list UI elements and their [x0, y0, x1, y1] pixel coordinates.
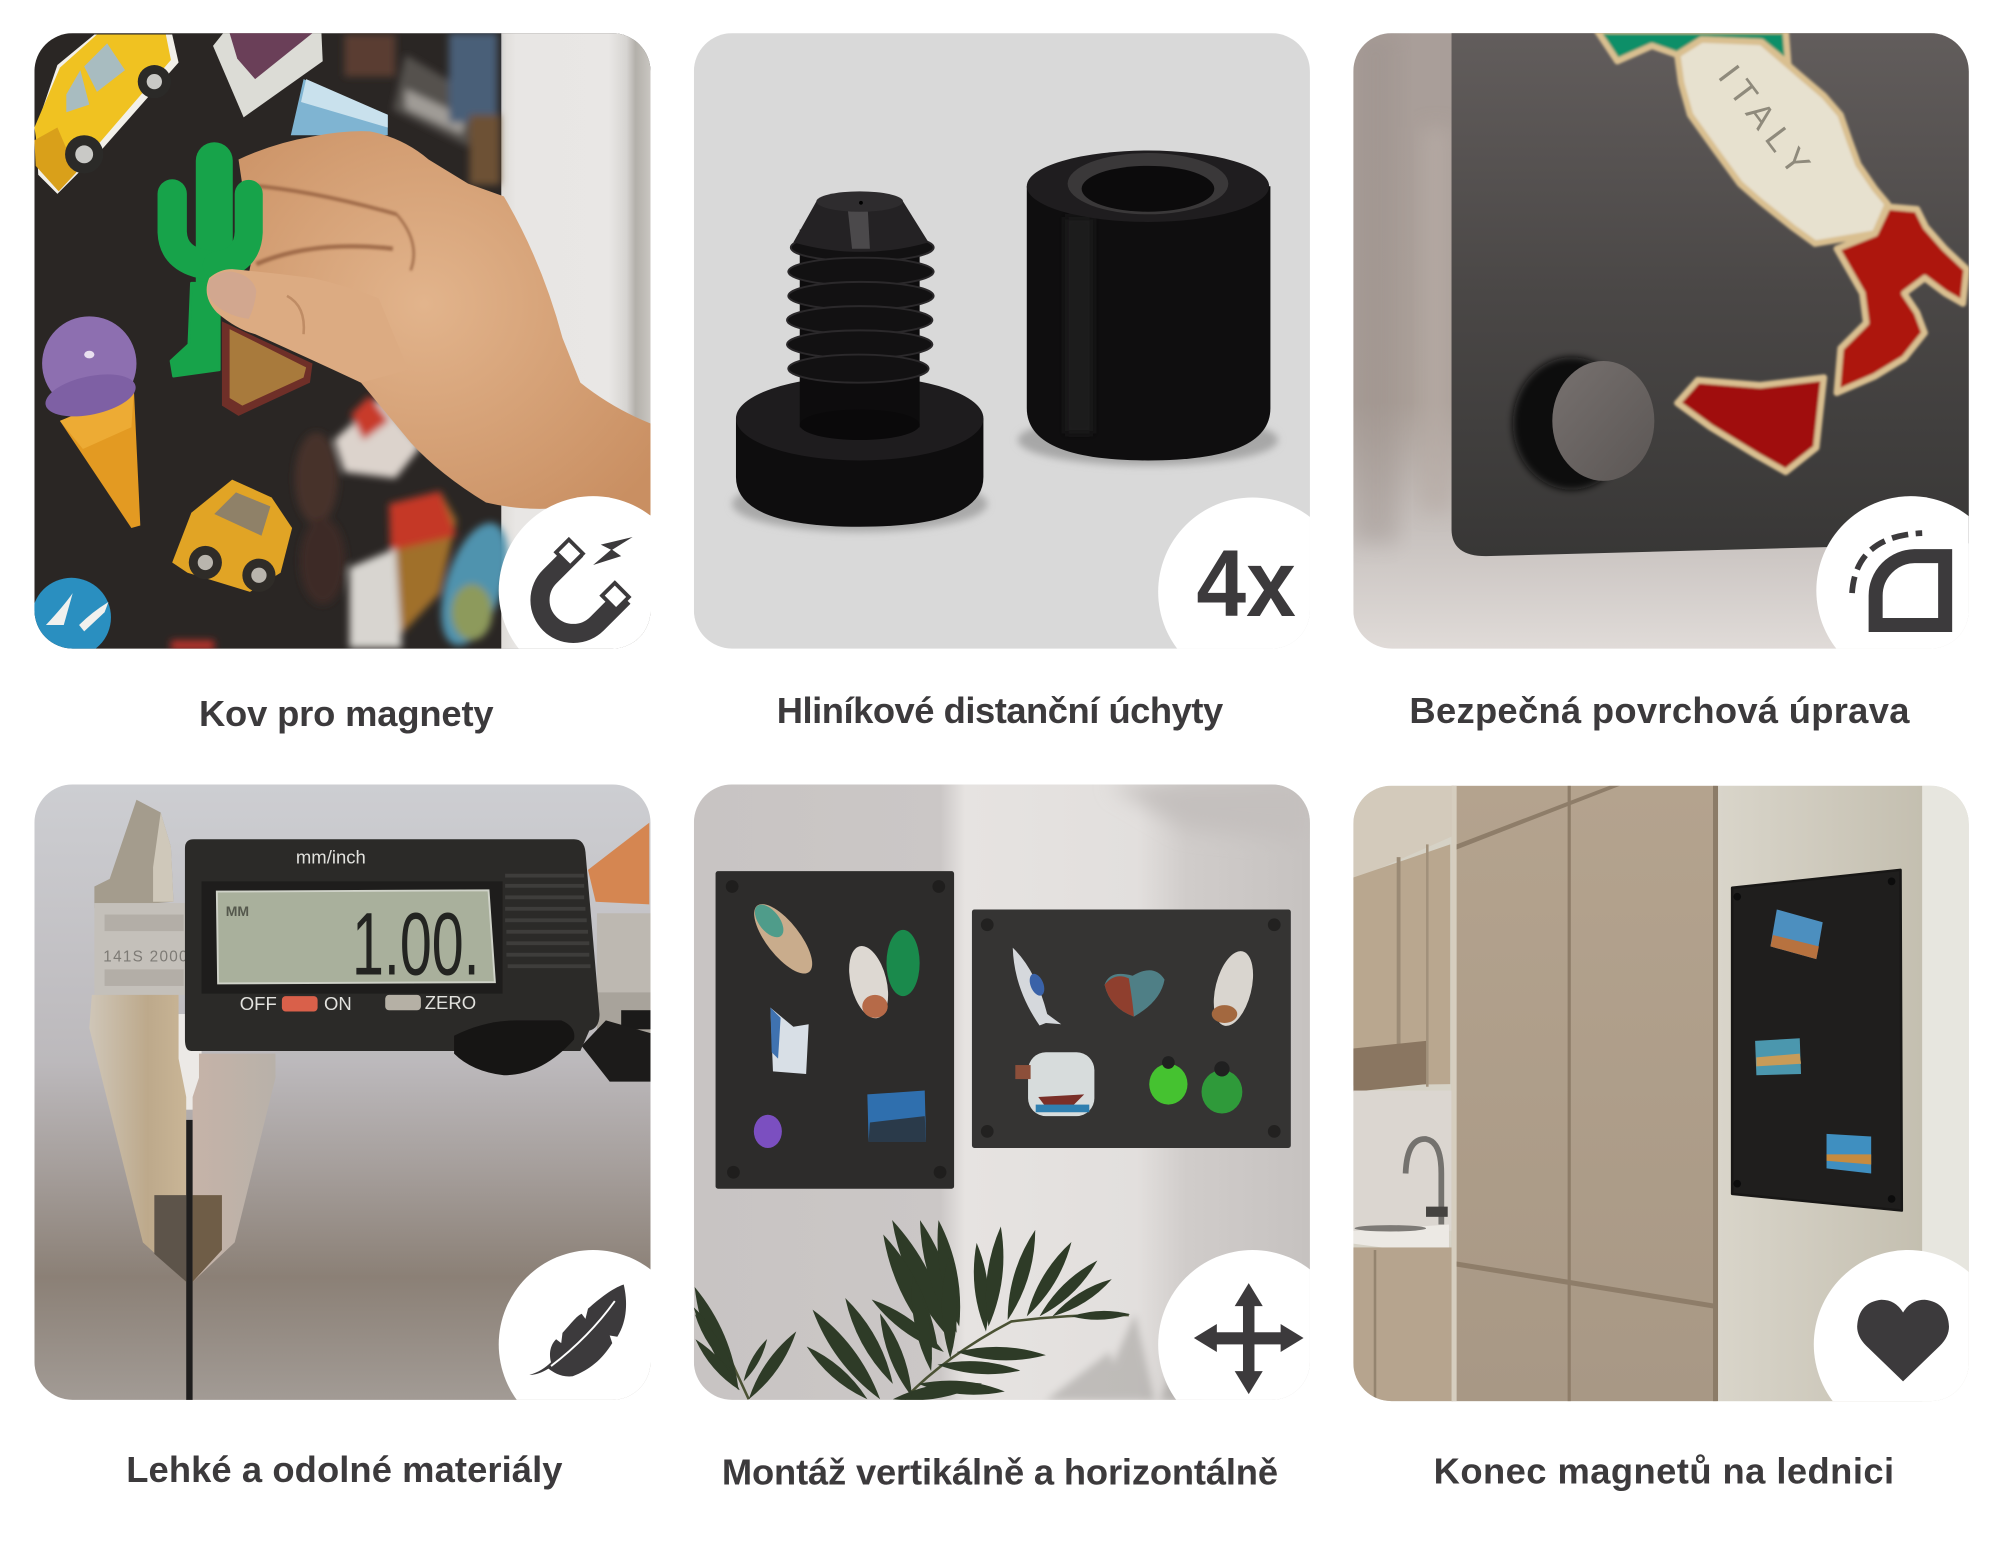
caption: Hliníkové distanční úchyty	[777, 690, 1224, 731]
panel: safe surface finish	[1353, 31, 2000, 731]
labels and buttons: ZERO	[425, 992, 476, 1013]
LCD display: 1.00.	[352, 893, 480, 993]
photo: dark board with magnets	[32, 33, 651, 657]
icon: rounded corner	[1852, 533, 1945, 625]
caption: Lehké a odolné materiály	[126, 1449, 563, 1490]
magnet: green cactus	[171, 161, 249, 376]
magnet: yellow car	[34, 34, 179, 194]
badge circle	[1814, 1250, 2000, 1439]
caption: Montáž vertikálně a horizontálně	[722, 1452, 1278, 1493]
icon: magnet	[540, 537, 633, 633]
magnet: misc behind cactus	[222, 321, 312, 416]
photo: cylinder spacer	[1018, 151, 1278, 466]
labels and buttons: mm/inch	[296, 847, 366, 868]
plant	[694, 1220, 1176, 1400]
icon: four-way arrows	[1194, 1283, 1304, 1394]
photo: threaded bolt	[732, 191, 987, 532]
magnets	[744, 895, 926, 1148]
photo: tall cabinets	[1452, 786, 1718, 1402]
magnet text: ITALY: ITALY	[1710, 58, 1822, 189]
icon: feather	[529, 1284, 626, 1376]
photo: caliper jaws: 141S 2000	[103, 949, 189, 966]
panel: end of magnets on the fridge	[1353, 786, 2000, 1491]
icon: 4x: 4x	[1196, 532, 1296, 637]
photo: caliper body	[185, 839, 599, 1075]
icon: heart	[1857, 1300, 1949, 1381]
panel: aluminium spacers	[694, 33, 1347, 731]
badge circle	[1158, 498, 1310, 648]
labels and buttons: ON	[324, 993, 352, 1014]
magnet: taxi	[172, 480, 292, 592]
badge circle	[1158, 1250, 1310, 1400]
magnet: Italy map	[1597, 31, 1967, 472]
badge circle	[498, 496, 650, 649]
photo: hand fingers and back	[239, 131, 651, 515]
magnet: blue round	[34, 578, 111, 649]
faucet	[1406, 1139, 1441, 1224]
board: vertical	[716, 871, 954, 1189]
badge circle	[1816, 496, 1969, 648]
caption: Kov pro magnety	[199, 693, 494, 734]
photo: standoff knob	[1513, 357, 1654, 490]
caption: Konec magnetů na lednici	[1434, 1450, 1894, 1491]
caption: Bezpečná povrchová úprava	[1409, 690, 1910, 731]
panel: metal for magnets	[32, 33, 687, 734]
badge circle	[498, 1250, 650, 1400]
photo: left kitchen	[1353, 786, 1454, 1402]
grip ridges	[505, 874, 591, 968]
magnet: ice cream	[42, 316, 140, 528]
labels and buttons	[240, 847, 476, 1014]
board: horizontal	[972, 909, 1291, 1148]
photo magnets	[1755, 909, 1871, 1173]
photo: wall and strip	[1718, 786, 1922, 1402]
photo: black plate	[1452, 33, 1969, 556]
panel: light and durable materials	[34, 784, 687, 1490]
photo: caliper jaws	[89, 800, 651, 1401]
labels and buttons: OFF	[240, 993, 277, 1014]
magnet: photo frame	[213, 33, 388, 135]
magnets	[1013, 947, 1260, 1116]
panel: vertical and horizontal mounting	[687, 784, 1347, 1493]
LCD display	[217, 890, 495, 993]
thumb wheel	[454, 1020, 574, 1075]
photo: thumb	[206, 269, 361, 383]
magnetic board	[1732, 870, 1902, 1210]
LCD display: MM	[226, 903, 249, 919]
